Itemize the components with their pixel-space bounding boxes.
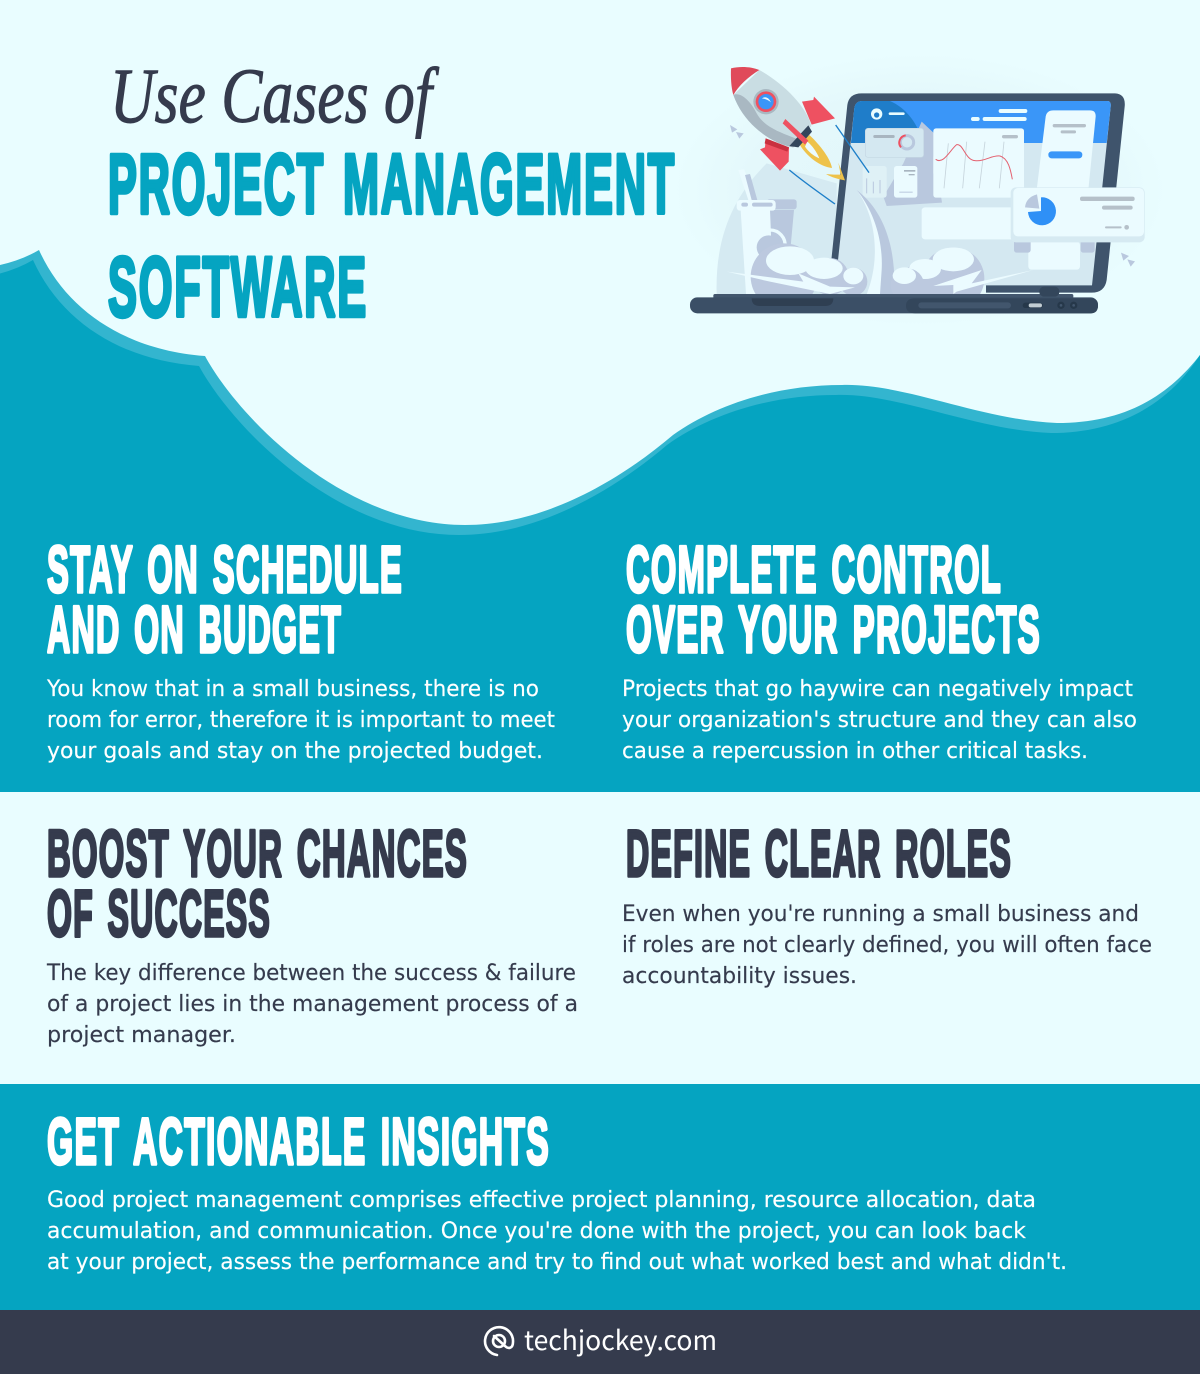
body text: [622, 677, 1137, 764]
heading: GET ACTIONABLE INSIGHTS: [47, 1104, 550, 1178]
left fin: [760, 138, 789, 171]
body text: [47, 1188, 1067, 1275]
body text: cause a repercussion in other critical tasks.: [622, 739, 1088, 764]
body text: if roles are not clearly defined, you will often face: [622, 933, 1152, 958]
rocket: [731, 67, 869, 204]
soft glow: [673, 53, 1167, 327]
laptop base: [690, 287, 1098, 313]
panel: get actionable insights: [0, 1084, 1200, 1310]
laptop screen: [831, 93, 1125, 294]
right fin: [802, 97, 835, 125]
rocket body: [733, 70, 811, 147]
empty cards: [922, 207, 1022, 239]
body text: [46, 677, 555, 764]
body text: room for error, therefore it is important to meet: [47, 708, 555, 733]
panel: boost your chances: BOOST YOUR CHANCES: [47, 816, 468, 890]
body text: your goals and stay on the projected budget.: [47, 739, 543, 764]
body text: Even when you're running a small business and: [622, 902, 1139, 927]
title script line: Use Cases of: [110, 52, 439, 139]
right card: [1037, 110, 1096, 190]
body text: accountability issues.: [622, 964, 857, 989]
icon: at sign: [485, 1327, 513, 1355]
panel: define clear roles: [622, 816, 1152, 989]
panel: boost your chances: [46, 816, 578, 1048]
illustration: rocket launching from laptop: [673, 53, 1167, 327]
body text: your organization's structure and they can also: [622, 708, 1137, 733]
body text: [46, 961, 578, 1048]
cup: [737, 169, 797, 294]
smoke clouds: [727, 235, 1033, 310]
rocket nozzle: [789, 125, 812, 147]
body text: Projects that go haywire can negatively impact: [622, 677, 1133, 702]
sparkles: [730, 125, 1135, 267]
heading: OF SUCCESS: [47, 876, 271, 950]
rocket nose: [731, 67, 759, 95]
small cards: [863, 166, 887, 198]
title line: software: SOFTWARE: [108, 240, 368, 334]
smoke trail: [857, 190, 894, 294]
panel: complete control: [622, 532, 1137, 764]
heading: [626, 532, 1041, 666]
footer bar: [0, 1310, 1200, 1374]
blue streaks: [789, 125, 869, 204]
body text: accumulation, and communication. Once you're done with the project, you can look back: [47, 1219, 1026, 1244]
body text: Good project management comprises effective project planning, resource allocation, data: [47, 1188, 1036, 1213]
body text: [622, 902, 1152, 989]
pale backdrop shape: [717, 163, 837, 294]
wave header background: [0, 250, 1200, 792]
body text: project manager.: [47, 1023, 236, 1048]
panel: stay on schedule: STAY ON SCHEDULE: [47, 532, 403, 606]
body text: The key difference between the success & failure: [46, 961, 576, 986]
line chart card: [933, 128, 1024, 198]
heading: [47, 816, 468, 950]
body text: at your project, assess the performance and try to find out what worked best and what didn't.: [47, 1250, 1067, 1275]
gauge card: [865, 128, 924, 157]
header logo: [871, 108, 882, 120]
body text: You know that in a small business, there is no: [46, 677, 539, 702]
website text: techjockey.com: [524, 1319, 717, 1358]
panel: stay on schedule: [46, 532, 555, 764]
rocket stripe: [783, 119, 808, 145]
pie card: [1011, 187, 1145, 242]
heading: AND ON BUDGET: [47, 592, 342, 666]
title: [108, 52, 676, 334]
heading: [47, 532, 403, 666]
title line: project management: PROJECT MANAGEMENT: [108, 137, 676, 231]
body text: of a project lies in the management process of a: [47, 992, 578, 1017]
rocket window: [753, 89, 779, 114]
flames: [799, 135, 832, 168]
shadow: [883, 122, 947, 206]
